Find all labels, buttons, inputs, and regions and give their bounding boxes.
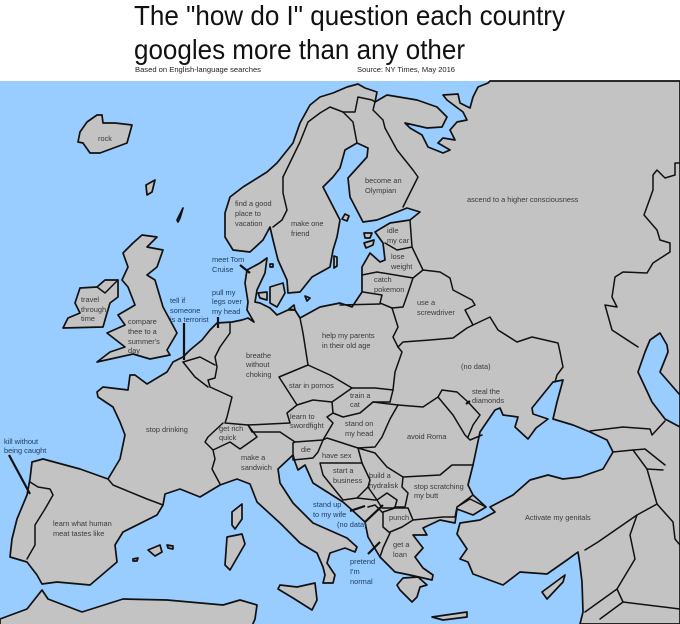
label: Albania: I'm [350, 567, 360, 576]
label: Bulgaria: my butt [414, 491, 438, 500]
Sicily [278, 583, 317, 610]
label: Netherlands: my head [212, 307, 240, 316]
label: Switzerland: get rich [219, 424, 243, 433]
label: Croatia: have sex [322, 451, 352, 460]
label: Italy: make a [241, 453, 266, 462]
label: Ukraine: (no data) [461, 362, 491, 371]
Cyprus [542, 575, 565, 599]
Great Britain [97, 235, 177, 362]
label: Spain: meat tastes like [53, 529, 104, 538]
label: Slovakia: train a [350, 391, 371, 400]
label: Bosnia: start a [333, 466, 354, 475]
pointer: Belgium [183, 323, 185, 360]
label: Portugal: being caught [4, 446, 46, 455]
label: Ireland: travel [81, 295, 99, 304]
pointer: Netherlands [217, 317, 219, 328]
Faroe Islands [146, 180, 155, 195]
label: Albania: pretend [350, 557, 375, 566]
title [134, 0, 565, 65]
label: Austria: learn to [290, 412, 315, 421]
label: France: stop drinking [146, 425, 188, 434]
label: Norway: place to [235, 209, 261, 218]
label: Latvia: lose [391, 252, 405, 261]
label: Bosnia: business [333, 476, 362, 485]
label: Hungary: stand on [345, 419, 373, 428]
label: Moldova: steal the [472, 387, 500, 396]
label: Portugal: kill without [4, 437, 38, 446]
label: Latvia: weight [390, 262, 412, 271]
pointer: Kosovo [365, 505, 383, 522]
label: Netherlands: legs over [212, 297, 243, 306]
label: Belarus: screwdriver [417, 308, 455, 317]
label: Sweden: friend [291, 229, 310, 238]
label: Ireland: time [81, 314, 95, 323]
Funen [258, 292, 267, 300]
label: Hungary: my head [345, 429, 373, 438]
label: Bulgaria: stop scratching [414, 482, 464, 491]
title: googles more than any other [134, 34, 465, 65]
label: United Kingdom: compare [128, 317, 157, 326]
label: Norway: vacation [235, 219, 263, 228]
subtitle: source: Source: NY Times, May 2016 [357, 65, 455, 74]
label: Greece: loan [393, 550, 407, 559]
Corsica [232, 504, 242, 529]
label: United Kingdom: day [128, 346, 140, 355]
subtitle: method note: Based on English-language searches [135, 65, 261, 74]
label: Estonia: my car [387, 236, 410, 245]
pointer: Albania [368, 542, 380, 554]
pointer: Moldova [466, 401, 470, 404]
Sardinia [225, 534, 245, 570]
label: Germany: choking [246, 370, 271, 379]
label: Poland: in their old age [322, 341, 370, 350]
label: Kosovo: (no data) [337, 520, 367, 529]
label: Estonia: idle [387, 226, 399, 235]
label: Belgium: is a terrorist [170, 315, 209, 324]
Ireland [63, 280, 118, 328]
pointer: Montenegro [350, 506, 365, 511]
label: Albania: normal [350, 577, 373, 586]
label: Montenegro: to my wife [313, 510, 346, 519]
label: Ireland: through [81, 305, 106, 314]
label: Netherlands: pull my [212, 288, 236, 297]
label: Germany: breathe [246, 351, 271, 360]
label: Belgium: tell if [170, 296, 186, 305]
Crete [432, 612, 467, 620]
country labels [4, 134, 591, 586]
label: Belarus: use a [417, 298, 436, 307]
pointer: Portugal [9, 455, 30, 494]
label: Spain: learn what human [53, 519, 112, 528]
Shetland [177, 208, 183, 222]
Baltic islands [270, 214, 374, 310]
label: Lithuania: pokemon [374, 285, 404, 294]
label: Sweden: make one [291, 219, 323, 228]
label: Finland: become an [365, 176, 402, 185]
label: Slovenia: die [301, 445, 311, 454]
label: Macedonia: punch [389, 513, 409, 522]
label: Romania: avoid Roma [407, 432, 447, 441]
label: Serbia: hydralisk [369, 481, 398, 490]
pointer: Denmark [240, 265, 250, 273]
Zealand [270, 283, 285, 307]
label: Turkey: Activate my genitals [525, 513, 591, 522]
label: Norway: find a good [235, 199, 272, 208]
label: Montenegro: stand up [313, 500, 341, 509]
label: Denmark: meet Tom [212, 255, 244, 264]
label: Belgium: someone [170, 306, 200, 315]
Peloponnese [397, 577, 427, 602]
label: Italy: sandwich [241, 463, 272, 472]
label: Switzerland: quick [219, 433, 237, 442]
label: Moldova: diamonds [472, 396, 504, 405]
label: Slovakia: cat [350, 400, 360, 409]
label: Germany: without [245, 360, 269, 369]
title: The "how do I" question each country [134, 0, 565, 31]
Iceland [78, 115, 132, 153]
label: Poland: help my parents [322, 331, 375, 340]
label: United Kingdom: thee to a [128, 327, 158, 336]
label: United Kingdom: summer's [128, 337, 160, 346]
label: Finland: Olympian [365, 186, 396, 195]
Caspian Sea [638, 333, 680, 427]
label: Serbia: build a [369, 471, 392, 480]
label: Greece: get a [393, 540, 410, 549]
Africa [0, 590, 257, 624]
label: Iceland: rock [98, 134, 112, 143]
label: Russia: ascend to a higher consciousness [467, 195, 579, 204]
label: Austria: swordfight [290, 421, 324, 430]
label: Lithuania: catch [374, 275, 392, 284]
label: Czech Republic: star in pornos [289, 381, 334, 390]
label: Denmark: Cruise [212, 265, 233, 274]
Balearic Islands [133, 545, 173, 561]
